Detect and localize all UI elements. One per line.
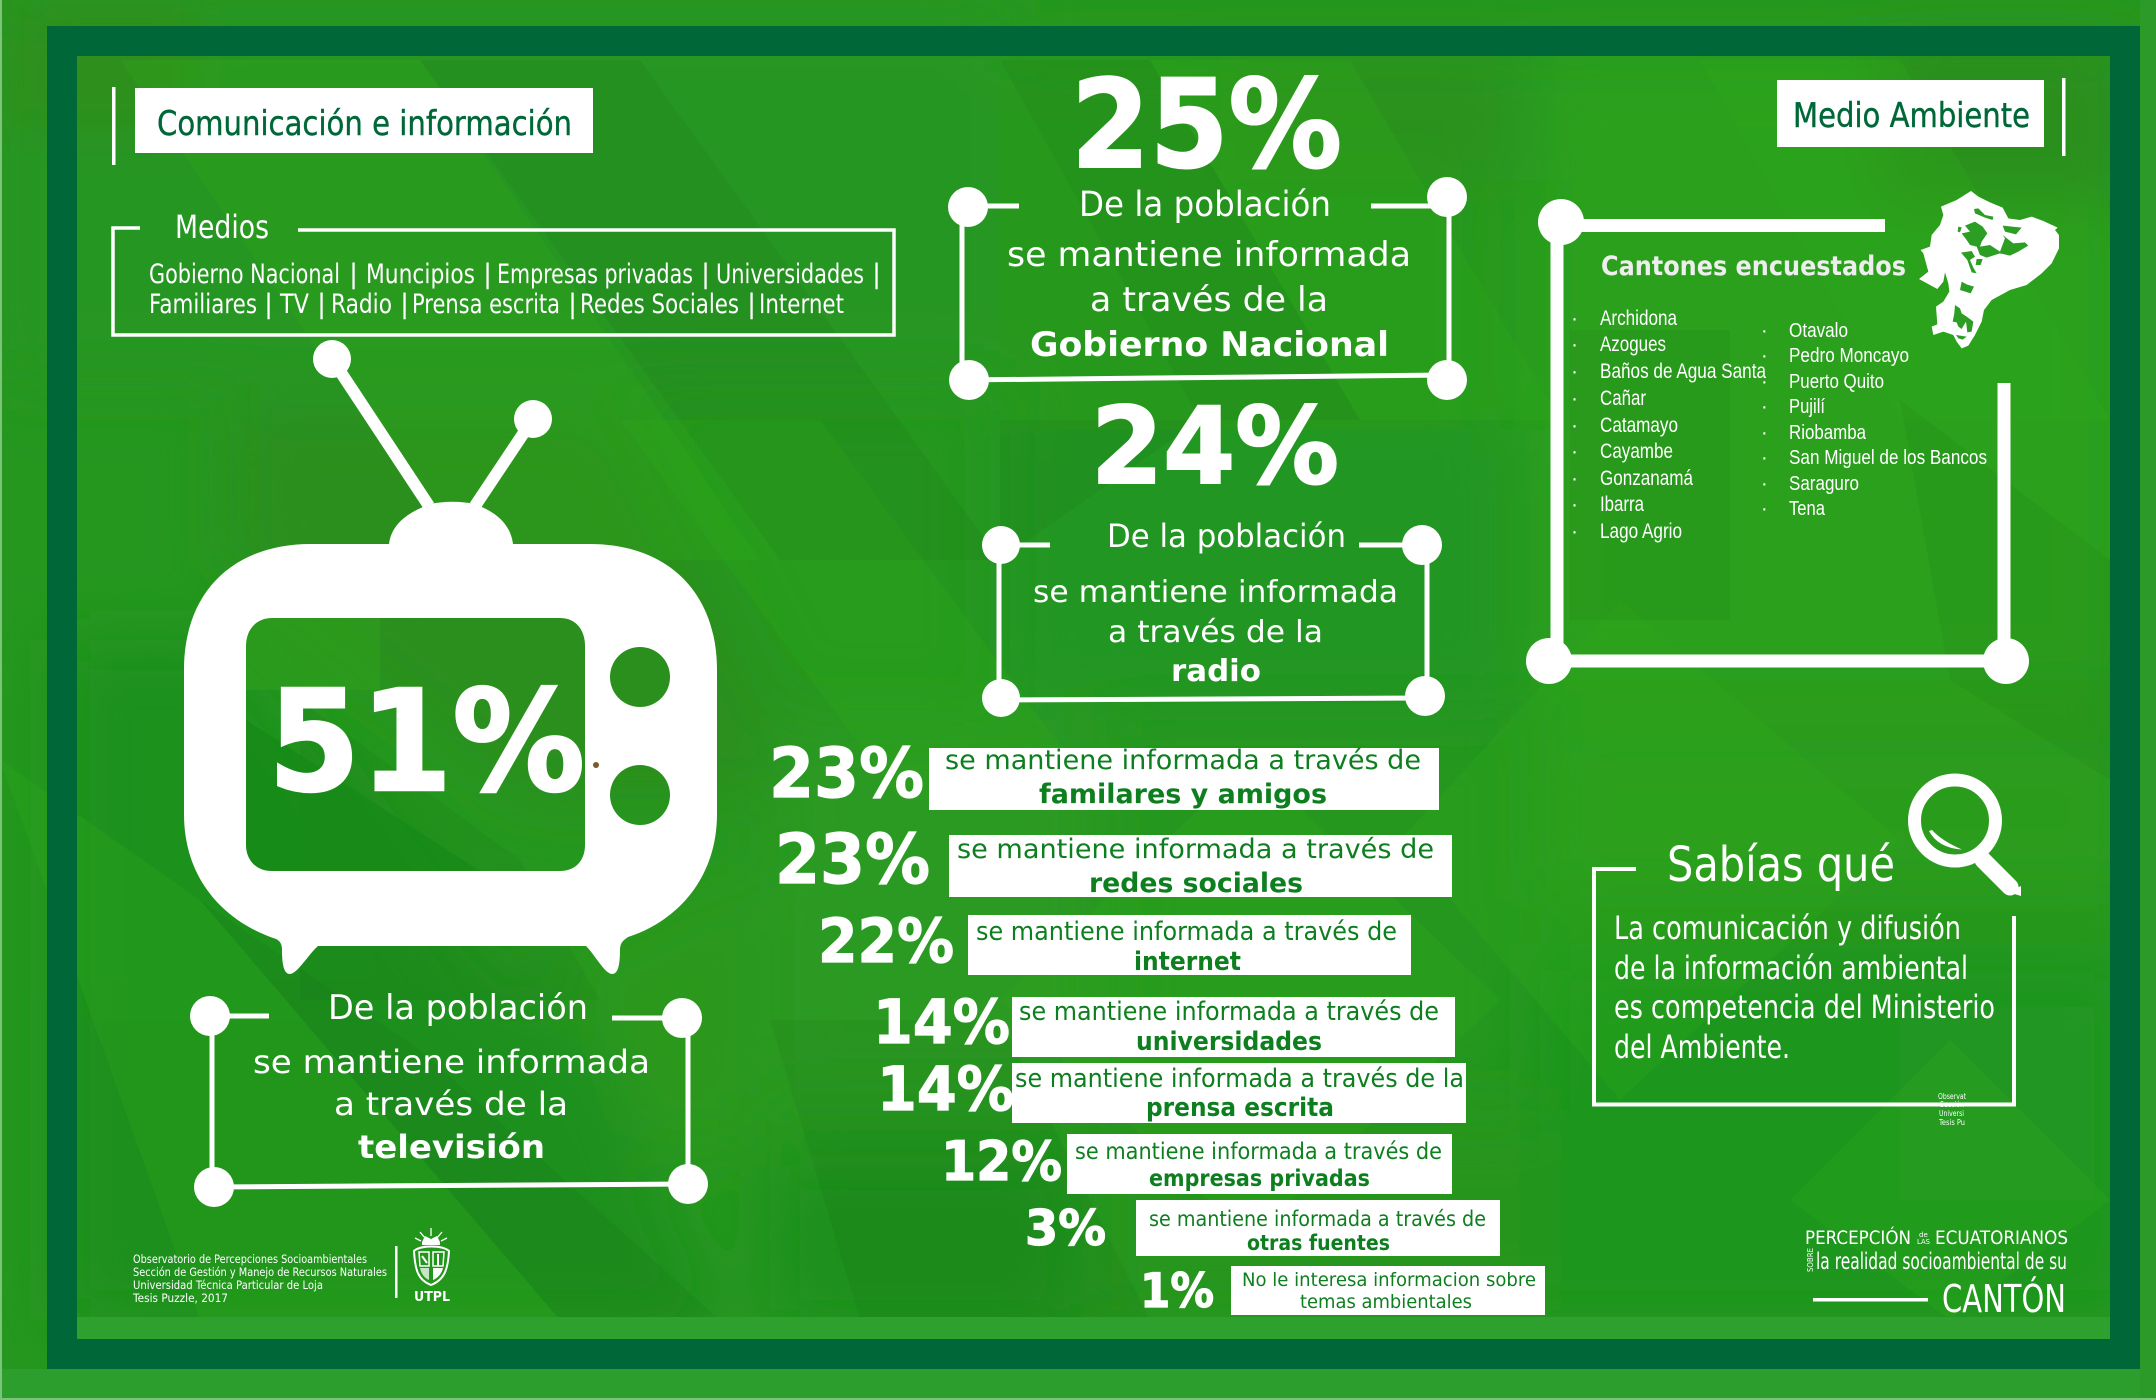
cantones list column 2: · (1761, 498, 1768, 520)
cantones list column 1: Catamayo (1600, 414, 1678, 437)
row: 1% temas ambientales: 1% (1140, 1264, 1214, 1319)
heading: Comunicación e información: Comunicación e información (157, 104, 572, 144)
medios list: | (701, 259, 710, 290)
panel: Gobierno Nacional: Gobierno Nacional (1030, 325, 1389, 365)
cantones list column 2: Puerto Quito (1789, 371, 1884, 393)
cantones list column 1: · (1571, 414, 1578, 437)
medios list: Redes Sociales (580, 289, 739, 320)
cantones list column 1: Baños de Agua Santa (1600, 360, 1766, 383)
cantones list column 1: Cayambe (1600, 440, 1673, 463)
cantones list column 2: Riobamba (1789, 422, 1867, 444)
row: 12% empresas privadas (941, 1130, 1452, 1194)
row: 14% prensa escrita: prensa escrita (1146, 1093, 1334, 1123)
title: percepción de los ecuatorianos: PERCEPCIÓN (1805, 1225, 1911, 1249)
icon: television (184, 340, 717, 974)
row: 23% familiares: 23% (769, 734, 924, 814)
tiny residual text (1938, 1092, 1966, 1127)
cantones list column 1 (1571, 307, 1766, 543)
panel: radio: De la población (1107, 517, 1346, 555)
medios title: Medios (175, 208, 269, 246)
panel: televisión: televisión (358, 1128, 545, 1166)
medios list: Prensa escrita (412, 289, 560, 320)
cantones list column 1: · (1571, 520, 1578, 543)
row: 14% universidades: 14% (873, 987, 1010, 1058)
panel: televisión: se mantiene informada (253, 1043, 650, 1081)
cantones list column 2: · (1761, 371, 1768, 393)
panel: radio (982, 517, 1445, 717)
medios list: Muncipios (366, 259, 475, 290)
medios list (149, 259, 881, 320)
medios list: Internet (759, 289, 844, 320)
cantones list column 1: Azogues (1600, 333, 1666, 356)
credit: observatorio (132, 1252, 387, 1305)
credit: observatorio: Universidad Técnica Particular de Loja (133, 1278, 323, 1292)
stat: 25%: 25% (1071, 54, 1342, 196)
row: 23% familiares (769, 734, 1439, 814)
medios list: | (349, 259, 358, 290)
heading: Medio Ambiente: Medio Ambiente (1793, 96, 2030, 136)
cantones list column 2: Saraguro (1789, 473, 1859, 495)
panel: radio: se mantiene informada (1033, 575, 1398, 610)
row: 14% prensa escrita: 14% (877, 1054, 1014, 1125)
row: 23% redes sociales: redes sociales (1089, 868, 1303, 899)
row: 22% internet: 22% (818, 906, 954, 977)
cantones list column 1: · (1571, 360, 1578, 383)
cantones list column 1: · (1571, 493, 1578, 516)
row: 14% prensa escrita (877, 1054, 1466, 1125)
medios list: Gobierno Nacional (149, 259, 340, 290)
cantones list column 1: Gonzanamá (1600, 467, 1693, 490)
panel: televisión: a través de la (334, 1085, 568, 1123)
tiny residual text: Tesis Pu (1938, 1118, 1965, 1127)
row: 23% redes sociales: 23% (775, 820, 930, 900)
cantones list column 1: · (1571, 307, 1578, 330)
panel: Gobierno Nacional (948, 177, 1467, 400)
cantones list column 1: · (1571, 467, 1578, 490)
cantones list column 1: Archidona (1600, 307, 1677, 330)
credit: observatorio: Observatorio de Percepciones Socioambientales (133, 1252, 367, 1266)
title: percepción de los ecuatorianos: LAS (1917, 1238, 1931, 1246)
cantones list column 1: Lago Agrio (1600, 520, 1682, 543)
patches behind tv screen (246, 720, 480, 871)
cantones list column 2: · (1761, 320, 1768, 342)
row: 23% redes sociales (775, 820, 1452, 900)
panel: Gobierno Nacional: se mantiene informada (1007, 235, 1411, 275)
medios list: TV (279, 289, 309, 320)
row: 3% otras fuentes: otras fuentes (1247, 1231, 1390, 1255)
row: 14% prensa escrita: se mantiene informada a través de la (1015, 1064, 1464, 1094)
title: percepción de los ecuatorianos: CANTÓN (1942, 1277, 2066, 1321)
sabías qué paragraph: es competencia del Ministerio (1614, 988, 1995, 1026)
cantones list column 2: · (1761, 345, 1768, 367)
medios list: | (400, 289, 409, 320)
row: 3% otras fuentes (1025, 1200, 1500, 1257)
cantones list column 2: · (1761, 396, 1768, 418)
row: 3% otras fuentes: se mantiene informada a través de (1149, 1207, 1486, 1231)
row: 23% redes sociales: se mantiene informada a través de (957, 834, 1434, 865)
medios list: Universidades (716, 259, 864, 290)
cantones list column 2: Otavalo (1789, 320, 1848, 342)
row: 1% temas ambientales (1140, 1264, 1545, 1319)
sabías qué paragraph: La comunicación y difusión (1614, 909, 1961, 947)
medios list: | (872, 259, 881, 290)
stat: 24%: 24% (1091, 385, 1339, 508)
cantones list column 1: · (1571, 333, 1578, 356)
cantones list column 1: Cañar (1600, 387, 1646, 410)
panel: medios (113, 208, 894, 335)
cantones list column 1: · (1571, 387, 1578, 410)
cantones title: Cantones encuestados (1601, 251, 1906, 282)
cantones list column 2 (1761, 320, 1987, 520)
row: 23% familiares: familares y amigos (1039, 779, 1327, 810)
medios list: | (264, 289, 273, 320)
title: percepción de los ecuatorianos: SOBRE (1806, 1248, 1815, 1272)
row: 14% universidades: se mantiene informada a través de (1019, 997, 1439, 1027)
row: 3% otras fuentes: 3% (1025, 1200, 1106, 1257)
panel: cantones encuestados (1526, 199, 2029, 684)
cantones list column 2: · (1761, 473, 1768, 495)
logo: UTPL (395, 1228, 450, 1305)
cantones list column 2: · (1761, 447, 1768, 469)
cantones list column 2: Pujilí (1789, 396, 1825, 418)
title: percepción de los ecuatorianos (1805, 1225, 2068, 1321)
sabías qué paragraph: de la información ambiental (1614, 949, 1968, 987)
panel: radio: radio (1171, 654, 1261, 689)
sabías qué title: Sabías qué (1667, 837, 1895, 893)
cantones list column 2: Tena (1789, 498, 1826, 520)
tiny residual text: Observat (1938, 1092, 1966, 1101)
title: percepción de los ecuatorianos: ECUATORIANOS (1935, 1227, 2068, 1249)
credit: observatorio: Sección de Gestión y Manejo de Recursos Naturales (133, 1265, 387, 1279)
logo: UTPL: UTPL (414, 1289, 450, 1305)
stat: 51%: 51% (268, 661, 585, 824)
row: 22% internet (818, 906, 1411, 977)
row: 23% familiares: se mantiene informada a través de (945, 745, 1421, 776)
medios list: Empresas privadas (497, 259, 693, 290)
panel: televisión: De la población (328, 988, 588, 1028)
tiny residual text: Sección (1940, 1100, 1964, 1109)
cantones list column 2: San Miguel de los Bancos (1789, 447, 1987, 469)
cantones list column 1: Ibarra (1600, 493, 1644, 516)
panel: Gobierno Nacional: a través de la (1090, 280, 1328, 320)
medios list: | (317, 289, 326, 320)
medios list: | (483, 259, 492, 290)
panel: radio: a través de la (1108, 615, 1323, 650)
row: 14% universidades (873, 987, 1455, 1058)
row: 14% universidades: universidades (1136, 1027, 1322, 1057)
cantones list column 2: Pedro Moncayo (1789, 345, 1909, 367)
sabías qué paragraph: del Ambiente. (1614, 1028, 1790, 1066)
medios list: | (568, 289, 577, 320)
sabías qué paragraph (1614, 909, 1995, 1066)
row: 12% empresas privadas: se mantiene informada a través de (1075, 1139, 1442, 1165)
medios list: Familiares (149, 289, 257, 320)
icon: map of Ecuador (1919, 191, 2059, 348)
tiny residual text: Universi (1939, 1109, 1964, 1118)
medios list: Radio (331, 289, 392, 320)
row: 22% internet: internet (1134, 947, 1241, 977)
cantones list column 1: · (1571, 440, 1578, 463)
row: 22% internet: se mantiene informada a través de (976, 917, 1397, 947)
row: 12% empresas privadas: empresas privadas (1149, 1166, 1370, 1192)
cantones list column 2: · (1761, 422, 1768, 444)
heading: Medio Ambiente (1777, 78, 2066, 156)
panel: televisión (190, 988, 708, 1207)
row: 1% temas ambientales: temas ambientales (1300, 1291, 1472, 1313)
row: 1% temas ambientales: No le interesa informacion sobre (1242, 1269, 1536, 1291)
medios list: | (747, 289, 756, 320)
row: 12% empresas privadas: 12% (941, 1130, 1062, 1193)
credit: observatorio: Tesis Puzzle, 2017 (132, 1291, 228, 1305)
heading: Comunicación e información (112, 87, 593, 165)
panel: sabías qué (1594, 837, 2014, 1127)
icon: magnifying glass (1914, 780, 2021, 896)
title: percepción de los ecuatorianos: de (1919, 1231, 1928, 1239)
panel: Gobierno Nacional: De la población (1079, 185, 1331, 225)
